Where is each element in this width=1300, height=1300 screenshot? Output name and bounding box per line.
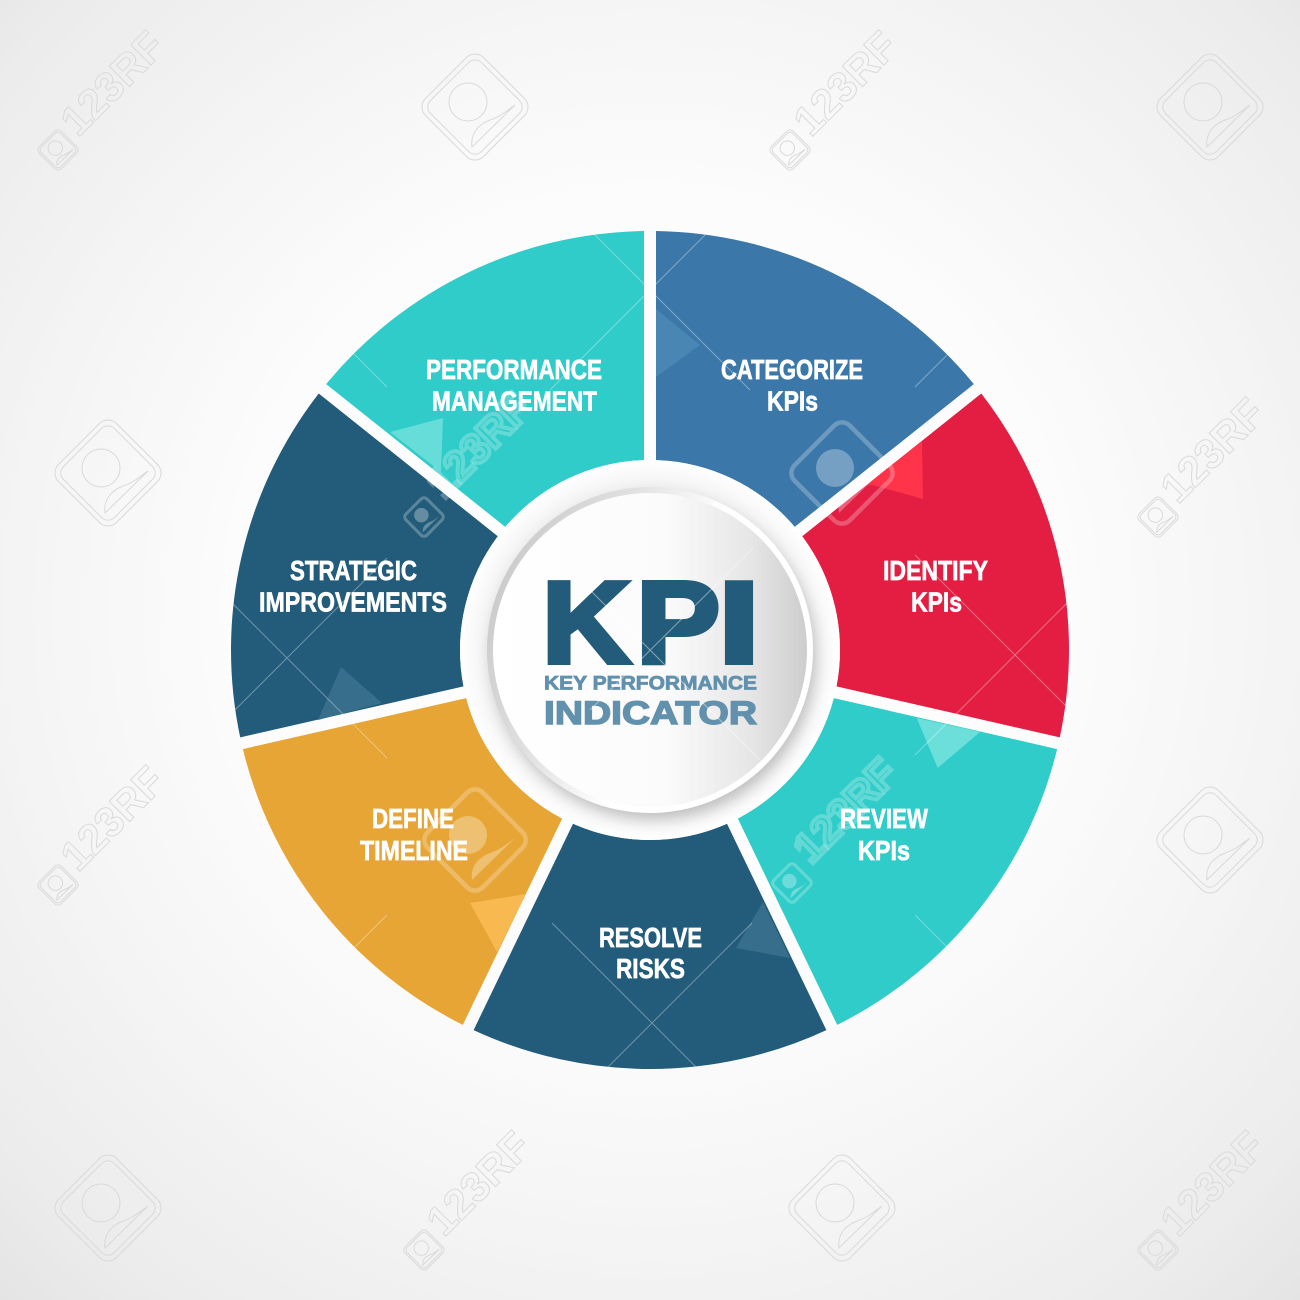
segment: review KPIs: [738, 698, 1057, 1025]
KPI heading: K: [542, 558, 630, 688]
label: resolve risks: RISKS: [616, 953, 685, 984]
label: review KPIs: KPIs: [858, 835, 910, 866]
label: define timeline: TIMELINE: [360, 835, 468, 866]
subtitle: key performance: KEY PERFORMANCE: [544, 673, 757, 694]
label: categorize KPIs: [721, 354, 863, 417]
segment: define timeline: [243, 698, 562, 1025]
KPI heading: [542, 557, 760, 688]
segment: resolve risks: [474, 824, 826, 1069]
watermarks on background: 123RF: [1151, 389, 1274, 512]
label: review KPIs: [840, 803, 928, 866]
center disc shadow: [492, 496, 816, 820]
center ring: [460, 460, 840, 840]
label: define timeline: DEFINE: [372, 803, 454, 834]
label: categorize KPIs: CATEGORIZE: [721, 354, 863, 385]
watermarks on background: 123RF: [51, 757, 174, 880]
KPI logo: [542, 557, 760, 731]
watermarks on background: 123RF: [1151, 1122, 1274, 1245]
label: identify KPIs: KPIs: [911, 587, 962, 618]
watermarks over wheel: 123RF: [784, 749, 907, 872]
label: identify KPIs: [883, 555, 988, 618]
label: performance management: PERFORMANCE: [426, 354, 602, 385]
label: resolve risks: [599, 922, 702, 984]
segment: strategic improvements: [231, 393, 498, 737]
label: resolve risks: RESOLVE: [599, 922, 702, 953]
KPI wheel: [231, 231, 1069, 1069]
watermarks over wheel: 123RF: [417, 384, 540, 507]
label: review KPIs: REVIEW: [840, 803, 928, 834]
watermarks on background: 123RF: [51, 22, 174, 145]
segment: performance management: [326, 231, 644, 527]
label: performance management: MANAGEMENT: [432, 386, 597, 417]
label: define timeline: [360, 803, 468, 866]
watermarks on background: 123RF: [417, 1122, 540, 1245]
label: strategic improvements: STRATEGIC: [290, 555, 417, 586]
watermarks on background: 123RF: [784, 22, 907, 145]
label: identify KPIs: IDENTIFY: [883, 555, 988, 586]
label: strategic improvements: [259, 555, 447, 618]
center disc: [487, 487, 813, 813]
KPI heading: I: [718, 558, 760, 688]
label: categorize KPIs: KPIs: [767, 386, 818, 417]
segment: identify KPIs: [802, 393, 1069, 737]
watermarks over wheel: [403, 384, 907, 904]
subtitle: indicator: INDICATOR: [544, 695, 757, 731]
label: performance management: [426, 354, 602, 417]
KPI heading: P: [636, 557, 720, 687]
segment: categorize KPIs: [656, 231, 974, 527]
label: strategic improvements: IMPROVEMENTS: [259, 587, 447, 618]
